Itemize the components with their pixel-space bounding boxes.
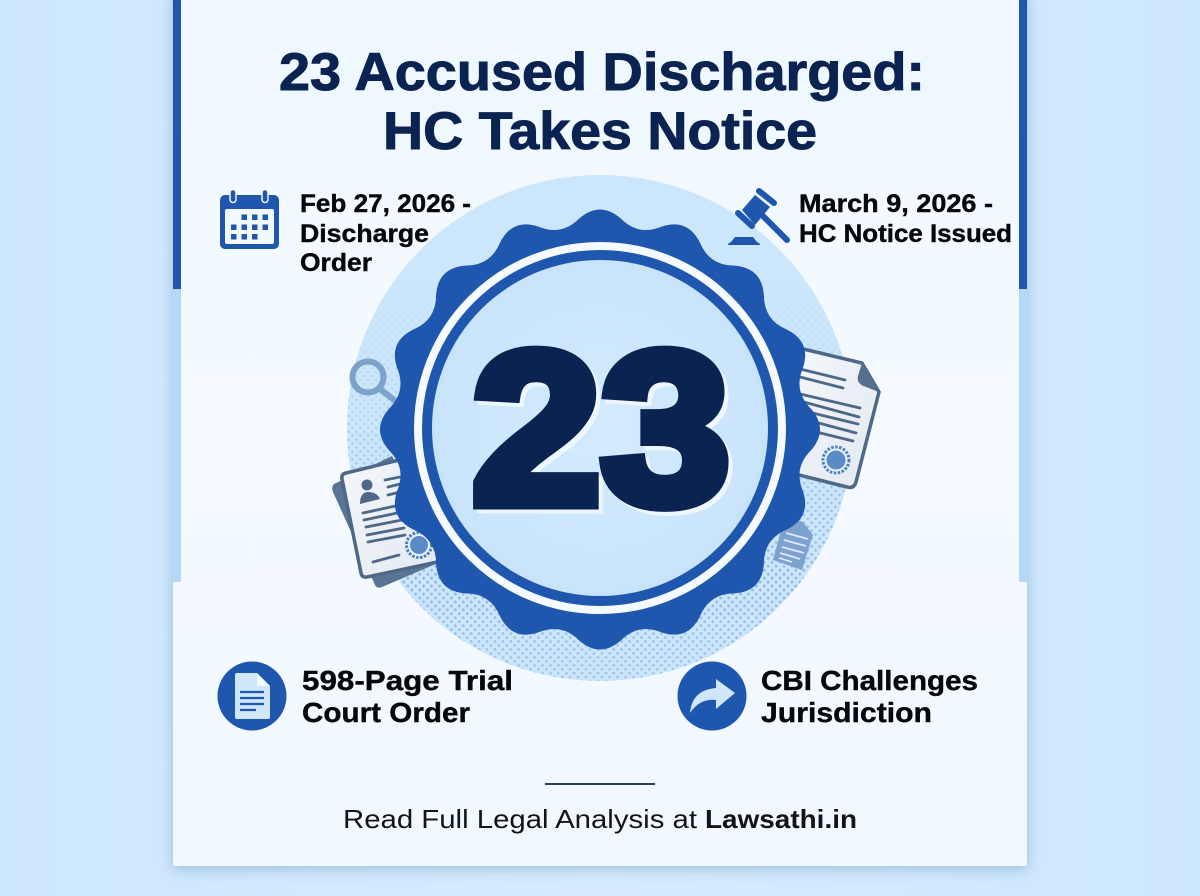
- text: cbi challenge: Jurisdiction: [761, 697, 932, 728]
- text: cbi challenge: [761, 665, 978, 728]
- title: HC Takes Notice: [383, 102, 817, 161]
- footer text: Read Full Legal Analysis at: [343, 804, 698, 834]
- badge: scalloped seal: [380, 210, 820, 650]
- icon: arrow circle: [678, 662, 746, 730]
- text: trial court order: 598-Page Trial: [302, 665, 513, 696]
- right accent bar: [1019, 0, 1027, 582]
- icon: magnifying glass: [352, 362, 398, 403]
- illustration: left documents: [332, 455, 445, 588]
- icon: document circle: [218, 662, 286, 730]
- left accent bar: [173, 0, 181, 582]
- icon: calendar: [220, 190, 279, 249]
- text: hc notice date: HC Notice Issued: [799, 220, 1012, 248]
- text: trial court order: [302, 665, 513, 728]
- big number 23: 23: [476, 311, 734, 553]
- icon: small faded document: [773, 515, 813, 570]
- text: cbi challenge: CBI Challenges: [761, 665, 978, 696]
- big number 23: 23: [472, 307, 730, 549]
- illustration: right document: [795, 347, 879, 487]
- text: discharge order date: Feb 27, 2026 -: [300, 190, 471, 218]
- text: discharge order date: [300, 190, 471, 277]
- footer text: Lawsathi.in: [705, 804, 857, 834]
- icon: gavel: [728, 191, 787, 245]
- text: discharge order date: Order: [300, 249, 372, 277]
- title: 23 Accused Discharged:: [279, 43, 925, 102]
- background disc with halftone dots: [347, 175, 853, 681]
- text: trial court order: Court Order: [302, 697, 470, 728]
- text: hc notice date: March 9, 2026 -: [799, 190, 993, 218]
- text: hc notice date: [799, 190, 1012, 248]
- text: discharge order date: Discharge: [300, 220, 429, 248]
- title: [279, 43, 925, 161]
- footer text: [343, 804, 857, 834]
- panel: main card: [173, 0, 1027, 866]
